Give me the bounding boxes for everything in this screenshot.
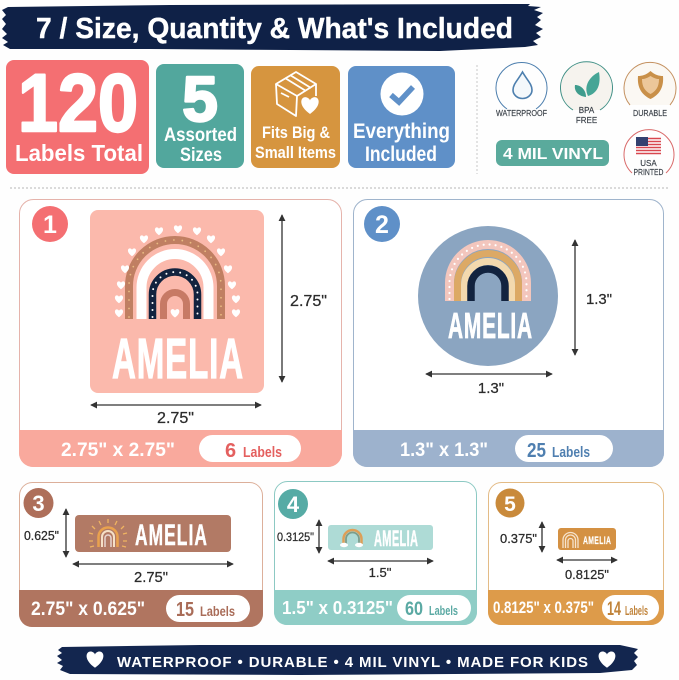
label sample: AMELIA	[374, 526, 418, 551]
number badge: 5	[504, 493, 516, 516]
stat tile: fits big and small items: Small Items	[255, 143, 336, 162]
dimension: height: 0.3125"	[277, 530, 314, 544]
rainbow	[340, 530, 363, 547]
dimension: height: 2.75"	[290, 293, 327, 310]
stat tile: 5 assorted sizes: 5	[182, 63, 218, 135]
label sample	[90, 210, 264, 393]
quantity pill: 25	[527, 440, 546, 462]
pill: 4 mil vinyl	[496, 140, 609, 166]
icon: box with heart	[276, 72, 319, 116]
stat tile: fits big and small items: Fits Big &	[262, 123, 330, 142]
quantity pill: Labels	[243, 444, 282, 461]
number badge	[24, 488, 54, 518]
rainbow	[450, 244, 526, 301]
dimension: width: 0.8125"	[565, 567, 609, 582]
rainbow	[89, 519, 127, 547]
quantity pill	[199, 435, 301, 462]
panel: size 2	[353, 200, 664, 467]
quantity pill	[166, 595, 250, 622]
round label sample	[418, 226, 558, 366]
icon badge: waterproof: WATERPROOF	[496, 109, 547, 118]
size text: 0.8125" x 0.375"	[493, 598, 594, 617]
pill: 4 mil vinyl: 4 MIL VINYL	[503, 146, 603, 163]
panel: size 5	[488, 482, 664, 625]
dimension: height: 0.625"	[24, 529, 59, 543]
number badge	[364, 206, 400, 242]
number badge: 4	[287, 492, 300, 517]
round label sample: AMELIA	[448, 306, 532, 347]
quantity pill: 60	[405, 599, 423, 620]
label sample	[75, 515, 231, 552]
dimension: height	[277, 520, 319, 553]
icon badge: durable	[624, 62, 676, 118]
icon badge: BPA free: BPA	[579, 106, 595, 115]
size text: 1.5" x 0.3125"	[282, 598, 393, 618]
bottom banner: WATERPROOF • DURABLE • 4 MIL VINYL • MADE FOR KIDS	[117, 654, 588, 671]
stat tile: 5 assorted sizes: Assorted	[164, 125, 237, 146]
rainbow	[129, 240, 221, 319]
label sample: AMELIA	[135, 519, 207, 552]
stat tile: 120 labels total	[6, 58, 149, 174]
stat tile: everything included: Everything	[353, 120, 450, 143]
label sample: AMELIA	[583, 534, 611, 546]
number badge	[278, 489, 308, 519]
rainbow	[563, 532, 578, 548]
label sample: AMELIA	[112, 327, 243, 390]
bottom banner	[57, 645, 638, 675]
dimension: width	[328, 561, 433, 580]
panel: size 3	[19, 482, 263, 627]
icon badge: USA printed: USA	[640, 159, 657, 168]
hearts	[115, 225, 240, 317]
number badge: 1	[43, 211, 57, 239]
panel: size 4	[274, 482, 477, 625]
stat tile: fits big and small items	[251, 66, 340, 168]
footer bar	[353, 430, 664, 467]
icon: check mark	[380, 72, 424, 116]
dimension: width: 1.5"	[369, 565, 392, 580]
icon: heart right	[599, 651, 615, 668]
dimension: width: 2.75"	[134, 569, 168, 586]
quantity pill: Labels	[200, 603, 235, 619]
number badge	[32, 206, 68, 242]
icon: heart left	[87, 651, 103, 668]
footer bar	[19, 590, 263, 627]
quantity pill: Labels	[625, 603, 648, 618]
number badge: 3	[32, 491, 45, 516]
quantity pill: Labels	[552, 444, 590, 461]
dimension: height: 0.375"	[500, 531, 537, 546]
dimension: height: 1.3"	[586, 291, 612, 308]
size text: 2.75" x 2.75"	[61, 440, 175, 461]
footer bar	[488, 590, 664, 625]
footer bar	[274, 590, 477, 625]
quantity pill	[397, 595, 471, 621]
dimension: width: 2.75"	[157, 410, 194, 427]
quantity pill: Labels	[429, 603, 458, 618]
dimension: width	[557, 560, 617, 582]
quantity pill: 6	[225, 440, 236, 462]
stat tile: 5 assorted sizes	[156, 63, 244, 168]
number badge: 2	[375, 211, 389, 239]
dimension: width: 1.3"	[478, 380, 504, 397]
icon badge: USA printed: PRINTED	[634, 168, 664, 177]
icon badge: BPA free	[561, 62, 612, 125]
size text: 2.75" x 0.625"	[31, 599, 145, 620]
stat tile: 120 labels total: Labels Total	[15, 140, 143, 166]
title banner: 7 / Size, Quantity & What's Included	[36, 13, 513, 45]
stat tile: 120 labels total: 120	[18, 58, 138, 149]
stat tile: 5 assorted sizes: Sizes	[180, 145, 222, 166]
quantity pill: 14	[607, 599, 621, 620]
quantity pill	[602, 595, 659, 621]
icon badge: BPA free: FREE	[576, 116, 597, 125]
icon: US flag	[636, 137, 661, 155]
stat tile: everything included	[348, 66, 455, 168]
label sample	[328, 525, 433, 551]
panel: size 1	[19, 200, 342, 467]
dimension: height	[500, 522, 542, 552]
dimension: height	[24, 509, 66, 557]
icon badge: USA printed	[624, 130, 674, 177]
dimension: height	[575, 240, 612, 355]
title banner	[2, 4, 543, 51]
number badge	[496, 488, 524, 518]
icon badge: waterproof	[496, 63, 547, 118]
size text: 1.3" x 1.3"	[400, 440, 488, 461]
quantity pill	[515, 435, 613, 462]
label sample	[558, 528, 616, 550]
stat tile: everything included: Included	[365, 143, 437, 166]
quantity pill: 15	[176, 599, 194, 621]
icon badge: durable: DURABLE	[633, 109, 667, 118]
footer bar	[19, 430, 342, 467]
dimension: width	[426, 374, 552, 397]
